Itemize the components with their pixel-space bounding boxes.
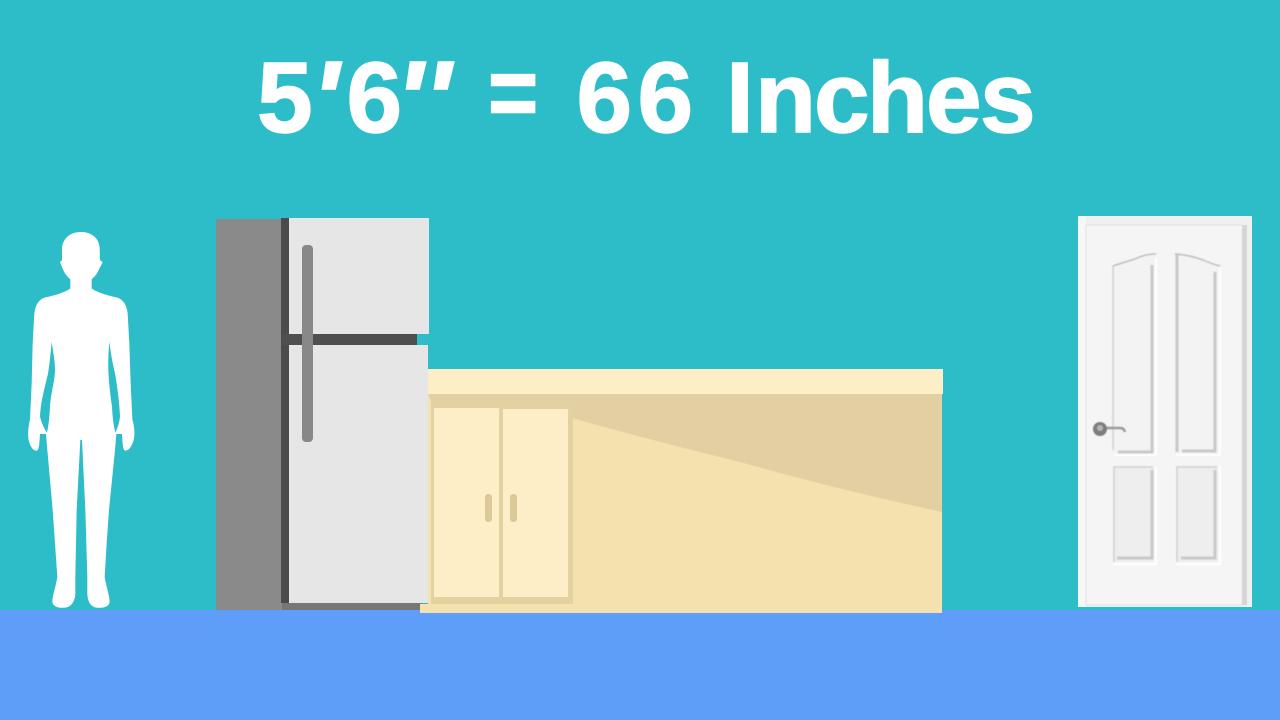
cabinet left door (434, 408, 499, 597)
upper left panel (1113, 254, 1156, 455)
fridge side panel (216, 219, 282, 610)
title: = (488, 37, 538, 148)
cabinet right door (503, 409, 568, 597)
door (1078, 216, 1252, 607)
icon: person silhouette (28, 232, 134, 608)
title: '' (398, 42, 453, 154)
counter top (428, 369, 943, 394)
title: 6 (346, 42, 402, 154)
fridge base shadow (282, 603, 422, 610)
cabinet frame (431, 401, 573, 604)
door knob (1093, 422, 1125, 436)
floor (0, 610, 1280, 720)
fridge upper door (289, 218, 429, 334)
fridge (216, 218, 429, 610)
counter wall shadow (428, 394, 942, 512)
title: ' (314, 42, 341, 154)
fridge handle (302, 245, 313, 442)
fridge divider (282, 334, 417, 345)
lower right panel (1176, 466, 1220, 564)
cabinet left handle (485, 494, 492, 522)
title (257, 37, 1036, 154)
upper right panel (1175, 254, 1220, 455)
fridge dark hinge strip (281, 218, 289, 603)
fridge lower door (289, 345, 428, 603)
cabinet right handle (510, 494, 517, 522)
door frame (1078, 216, 1252, 607)
counter body (420, 394, 942, 613)
kitchen counter (420, 369, 943, 613)
lower left panel (1113, 466, 1156, 564)
title: 66 Inches (576, 42, 1036, 154)
title: 5 (257, 42, 313, 154)
door slab (1086, 225, 1242, 605)
